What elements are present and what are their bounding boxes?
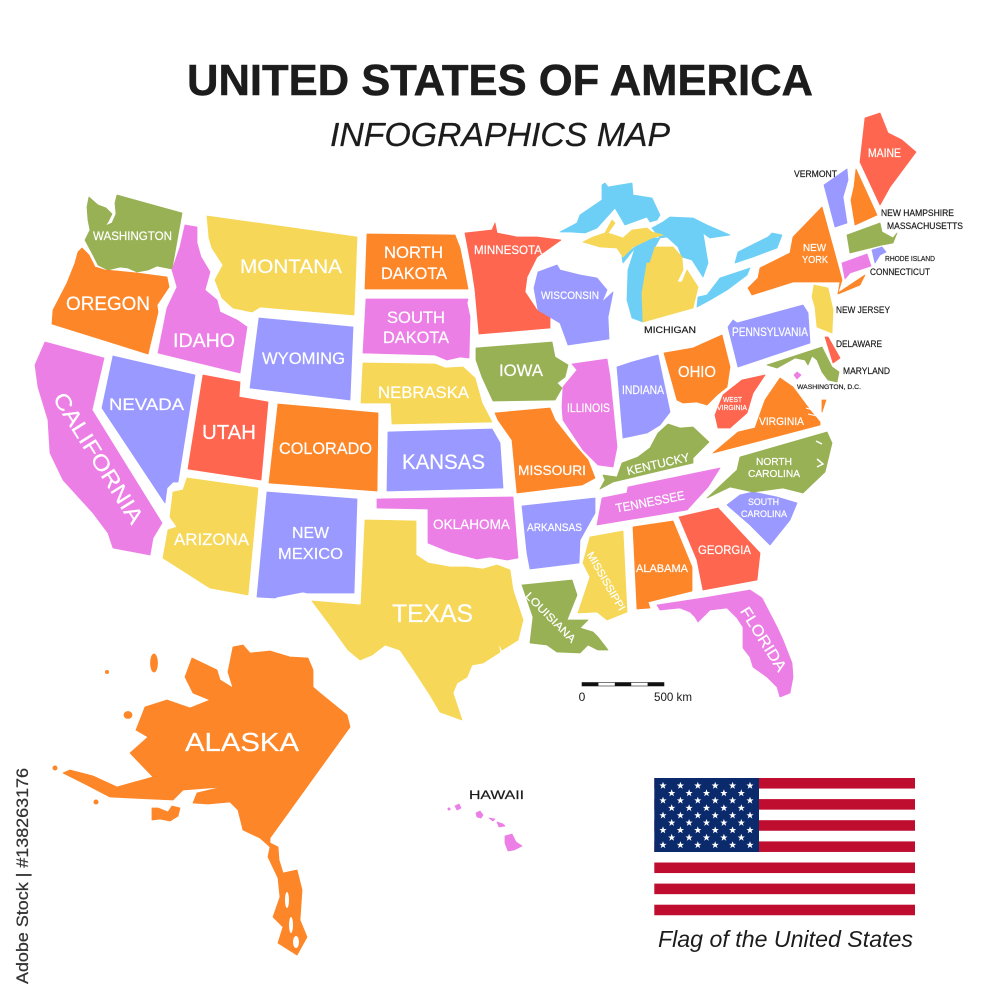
state: Oklahoma: OKLAHOMA: [433, 516, 511, 532]
state: Texas: TEXAS: [392, 600, 473, 628]
state: Virginia: VIRGINIA: [759, 416, 805, 428]
state: South Carolina: SOUTH: [748, 497, 779, 508]
state: Florida: FLORIDA: [736, 604, 790, 676]
state: Virginia: [713, 378, 826, 453]
state: Arkansas: ARKANSAS: [527, 522, 582, 534]
state: New York: YORK: [802, 254, 828, 266]
state: Oklahoma: [377, 497, 518, 560]
state: North Dakota: [365, 234, 468, 289]
state: South Dakota: SOUTH: [387, 308, 445, 327]
state: Vermont: [824, 169, 848, 227]
state: Ohio: [664, 335, 730, 405]
subtitle: INFOGRAPHICS MAP: [330, 116, 670, 153]
state: North Dakota: NORTH: [384, 243, 443, 262]
flag of the United States: [654, 778, 915, 915]
state: Wisconsin: [534, 265, 613, 345]
state: South Dakota: DAKOTA: [383, 328, 450, 347]
state: Illinois: ILLINOIS: [567, 403, 610, 415]
state: Alabama: ALABAMA: [636, 563, 689, 575]
title: UNITED STATES OF AMERICA: [187, 56, 813, 105]
state: Wisconsin: WISCONSIN: [541, 290, 599, 302]
state: Montana: [207, 216, 357, 315]
state: West Virginia: VIRGINIA: [717, 403, 747, 412]
state: New York: [748, 207, 865, 295]
state: Michigan: [583, 220, 698, 322]
scale bar: 500 km: [654, 690, 692, 704]
state: Maine: MAINE: [868, 148, 901, 160]
state: Massachusetts: [847, 223, 897, 253]
map: contiguous United States: [35, 113, 916, 720]
state: Mississippi: MISSISSIPPI: [584, 550, 627, 613]
state: Idaho: IDAHO: [173, 330, 235, 352]
state: Illinois: [562, 359, 617, 467]
state: Oregon: [52, 248, 169, 354]
state: Pennsylvania: PENNSYLVANIA: [732, 327, 808, 339]
state: Missouri: [495, 408, 595, 493]
state: Nevada: NEVADA: [109, 395, 185, 414]
state: Washington D.C.: [794, 372, 801, 379]
state: West Virginia: WEST: [723, 395, 742, 404]
state: Idaho: [158, 225, 247, 373]
stock image credit: Adobe Stock | #138263176: [13, 768, 32, 984]
state labels: small north-eastern states: DELAWARE: [836, 339, 882, 349]
state: Minnesota: [465, 223, 561, 334]
state: Florida: [657, 590, 793, 697]
state: Georgia: [679, 508, 760, 590]
state: Kansas: [387, 429, 503, 491]
state labels: small north-eastern states: CONNECTICUT: [870, 267, 931, 277]
state: Wyoming: [250, 318, 353, 400]
state: Washington: WASHINGTON: [93, 231, 172, 243]
state: Louisiana: LOUISIANA: [523, 590, 578, 646]
state: Nevada: [102, 356, 195, 503]
state: Kentucky: [600, 424, 709, 489]
state: Hawaii: HAWAII: [469, 790, 524, 802]
state: New Hampshire: [851, 169, 877, 225]
state: Alaska: ALASKA: [185, 729, 299, 757]
state labels: small north-eastern states: [644, 169, 963, 391]
state: Utah: [188, 375, 268, 480]
state: New Mexico: [257, 492, 357, 598]
state: Arizona: ARIZONA: [174, 531, 249, 549]
state: New Jersey: [812, 285, 833, 333]
state: Connecticut: [842, 254, 871, 279]
state labels: small north-eastern states: NEW JERSEY: [836, 305, 890, 315]
state: Iowa: [476, 342, 568, 401]
state: Iowa: IOWA: [499, 362, 543, 380]
state: Tennessee: TENNESSEE: [615, 489, 686, 516]
state: Georgia: GEORGIA: [698, 543, 751, 557]
state labels: small north-eastern states: MARYLAND: [843, 366, 890, 376]
state: Alabama: [633, 521, 692, 609]
state: Tennessee: [597, 468, 720, 525]
state: Indiana: [617, 355, 670, 438]
state: North Carolina: [707, 432, 832, 498]
state: Colorado: [269, 404, 378, 491]
state labels: small north-eastern states: VERMONT: [794, 169, 837, 179]
state: Arizona: [163, 478, 258, 595]
state labels: small north-eastern states: MASSACHUSETTS: [887, 221, 963, 231]
state: Rhode Island: [872, 247, 886, 263]
state: Nebraska: [361, 363, 492, 424]
state: New York: NEW: [803, 242, 826, 254]
state: Washington: [85, 195, 182, 272]
state: Minnesota: MINNESOTA: [474, 243, 542, 257]
state: North Carolina: CAROLINA: [748, 468, 800, 480]
scale bar: 0: [579, 690, 586, 704]
state: California: CALIFORNIA: [48, 388, 149, 529]
state: Arkansas: [522, 498, 595, 569]
state: West Virginia: [715, 375, 765, 428]
state: California: [35, 342, 162, 555]
state labels: small north-eastern states: MICHIGAN: [644, 325, 696, 336]
state: Ohio: OHIO: [678, 364, 716, 381]
state: Oregon: OREGON: [66, 294, 150, 315]
state: Kentucky: KENTUCKY: [625, 450, 691, 478]
state: Wyoming: WYOMING: [262, 350, 345, 368]
flag caption: Flag of the United States: [658, 926, 913, 952]
state: Mississippi: [578, 531, 627, 620]
state: Louisiana: [522, 580, 608, 653]
state: South Dakota: [363, 299, 470, 360]
state: Hawaii: [448, 790, 524, 851]
state: Alaska: [53, 645, 350, 955]
state: Indiana: INDIANA: [622, 385, 664, 397]
state labels: small north-eastern states: RHODE ISLAND: [885, 254, 936, 263]
state: North Dakota: DAKOTA: [381, 264, 448, 283]
state: South Carolina: CAROLINA: [741, 509, 788, 520]
state: South Carolina: [727, 492, 797, 545]
state: Nebraska: NEBRASKA: [378, 383, 470, 402]
great lakes: [560, 183, 782, 322]
state: North Carolina: NORTH: [756, 456, 792, 468]
state: Maryland: [767, 347, 839, 382]
state: New Mexico: MEXICO: [278, 546, 343, 563]
state: Colorado: COLORADO: [279, 440, 372, 458]
state: New Mexico: NEW: [292, 525, 330, 542]
state: Pennsylvania: [728, 305, 810, 367]
state: Delaware: [825, 337, 840, 363]
scale bar: [579, 682, 692, 704]
state: Utah: UTAH: [202, 422, 256, 444]
state: Texas: [312, 520, 523, 720]
state: Kansas: KANSAS: [402, 450, 485, 474]
state labels: small north-eastern states: NEW HAMPSHIRE: [881, 208, 954, 218]
state: Maine: [860, 113, 916, 205]
state labels: small north-eastern states: WASHINGTON, D.C.: [797, 384, 861, 391]
state: Missouri: MISSOURI: [518, 463, 586, 478]
state: Montana: MONTANA: [240, 256, 342, 278]
